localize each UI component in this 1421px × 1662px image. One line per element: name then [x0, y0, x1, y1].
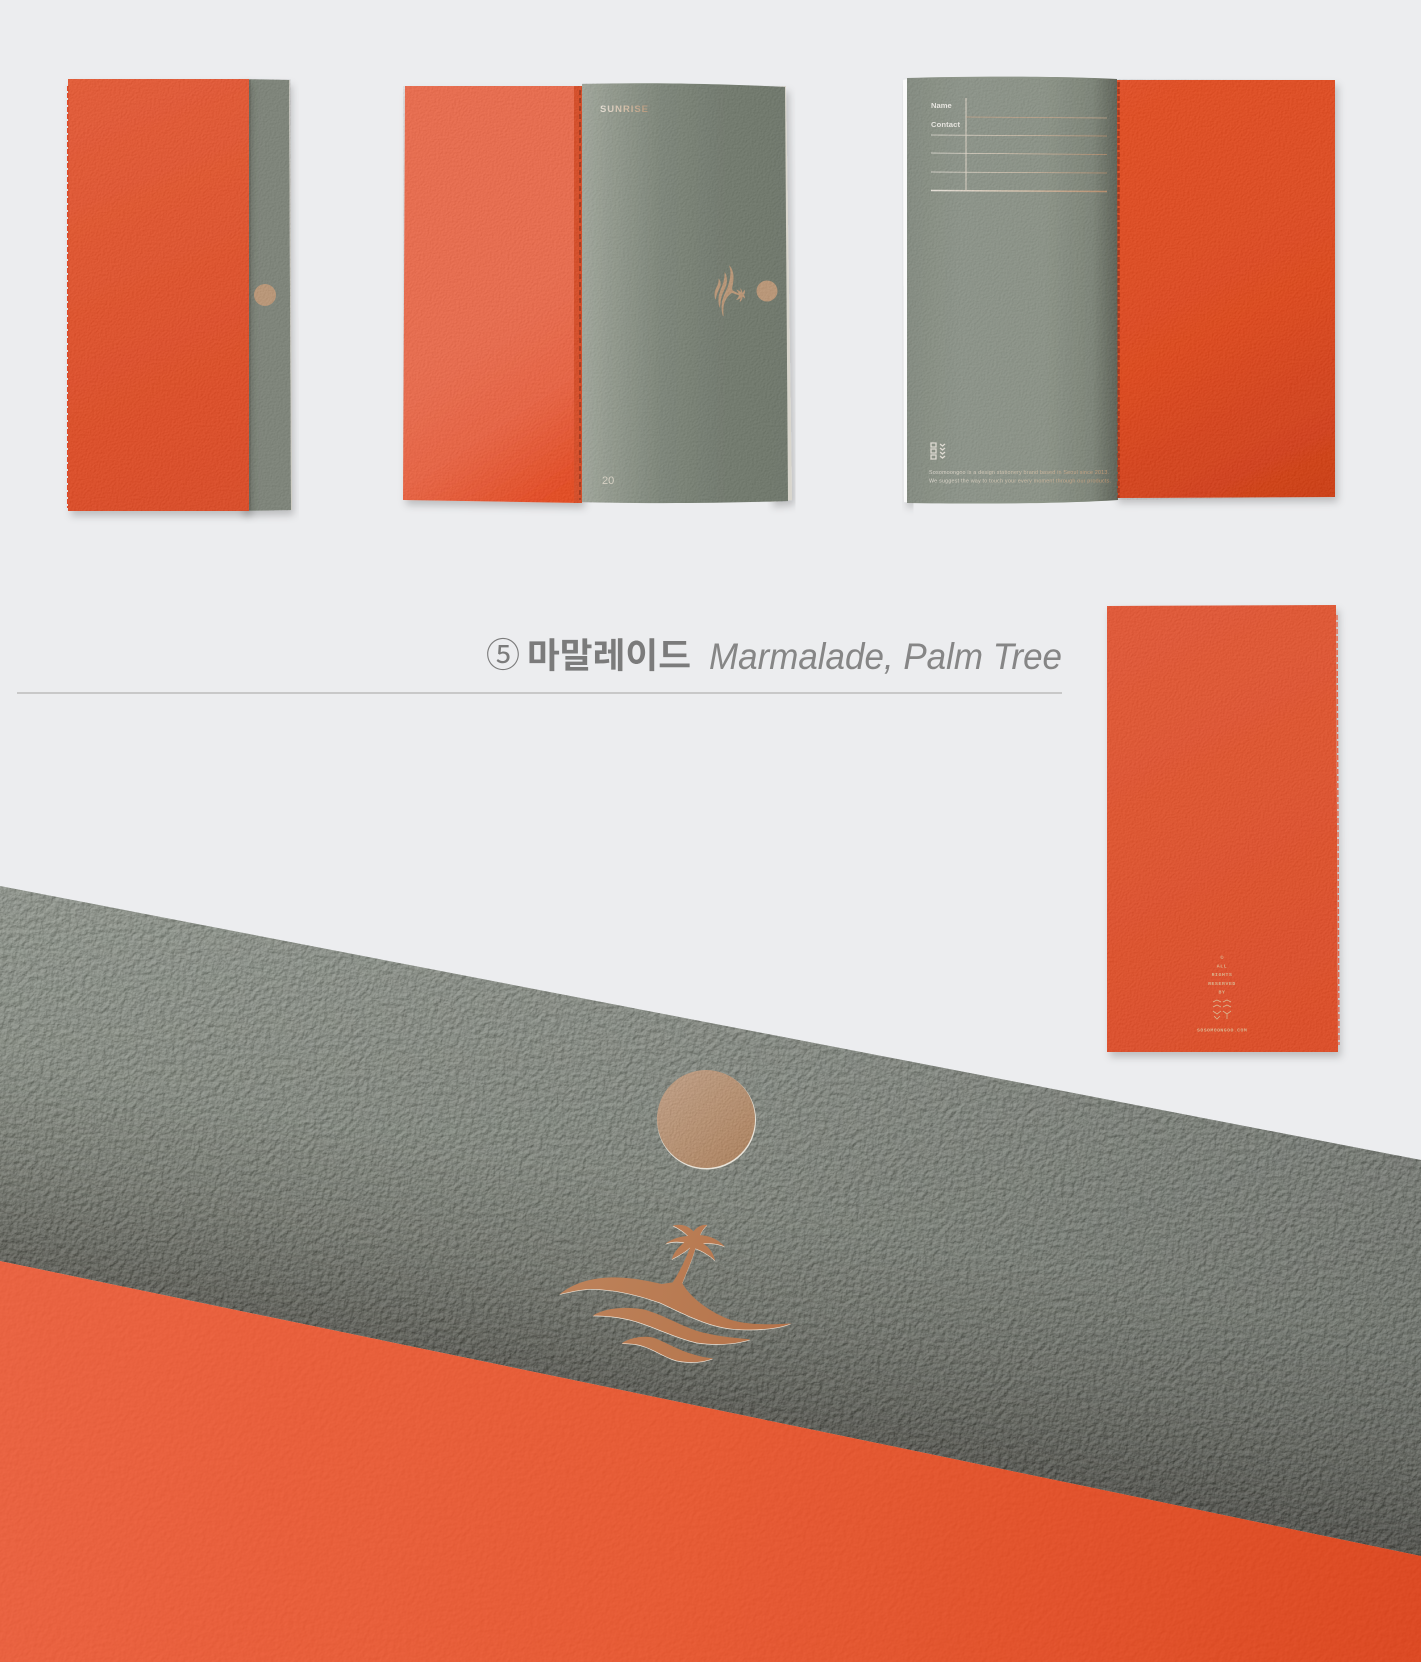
paper texture: [0, 1255, 1421, 1662]
English title: Marmalade, Palm Tree: [709, 636, 1062, 677]
fine paper grain on small books: [60, 70, 1350, 1060]
copyright text: BY: [1219, 990, 1225, 996]
copyright text: RIGHTS: [1212, 972, 1232, 978]
orange cover: [1107, 605, 1338, 1052]
brand statement: We suggest the way to touch your every moment through our products.: [929, 478, 1111, 484]
circled number: ⑤: [486, 637, 520, 675]
grey right page: [582, 83, 788, 503]
foil sun: [657, 1070, 756, 1170]
SUNRISE heading: SUNRISE: [600, 104, 648, 115]
copyright text: ALL: [1217, 964, 1227, 970]
orange front flap: [68, 79, 249, 511]
copper sun: [756, 280, 778, 302]
name / contact form: Name: [931, 101, 952, 110]
brand statement: [929, 470, 1111, 484]
copyright text: [1197, 954, 1247, 1034]
heading rule: [17, 692, 1062, 694]
name / contact form: [931, 98, 1107, 192]
orange right page: [1115, 80, 1335, 498]
rotated palm island icon: [715, 266, 745, 316]
copyright text: SOSOMOONGOO.COM: [1197, 1028, 1247, 1034]
macro photo: orange flap: [0, 1255, 1421, 1662]
book 3: open notebook, name page: [903, 77, 1335, 504]
macro photo: grey cover with copper foil: [0, 880, 1421, 1560]
grey band: [0, 886, 1421, 1556]
book 4: back cover: [1107, 605, 1339, 1052]
section heading: [486, 628, 1062, 679]
brand mark: [1213, 1000, 1231, 1019]
grey left page: [907, 77, 1118, 504]
white page edge: [903, 78, 912, 503]
stitched spine: [574, 86, 582, 503]
orange left page: [403, 86, 582, 503]
copper sun dot: [254, 284, 276, 306]
brand mark: [931, 443, 945, 459]
page number: 20: [602, 475, 614, 487]
copyright text: ©: [1221, 954, 1224, 961]
grey back cover strip: [240, 79, 291, 511]
paper texture: [0, 880, 1421, 1560]
book 2: open notebook, SUNRISE page: [403, 83, 792, 503]
brand statement: Sosomoongoo is a design stationery brand based in Seoul since 2013.: [929, 470, 1109, 476]
name / contact form: Contact: [931, 120, 960, 129]
page block edge: [770, 86, 792, 502]
book 1: closed notebook with flap: [68, 79, 292, 511]
copyright text: RESERVED: [1208, 981, 1236, 987]
Korean title: 마말레이드: [527, 628, 691, 679]
foil palm island: [559, 1225, 792, 1363]
